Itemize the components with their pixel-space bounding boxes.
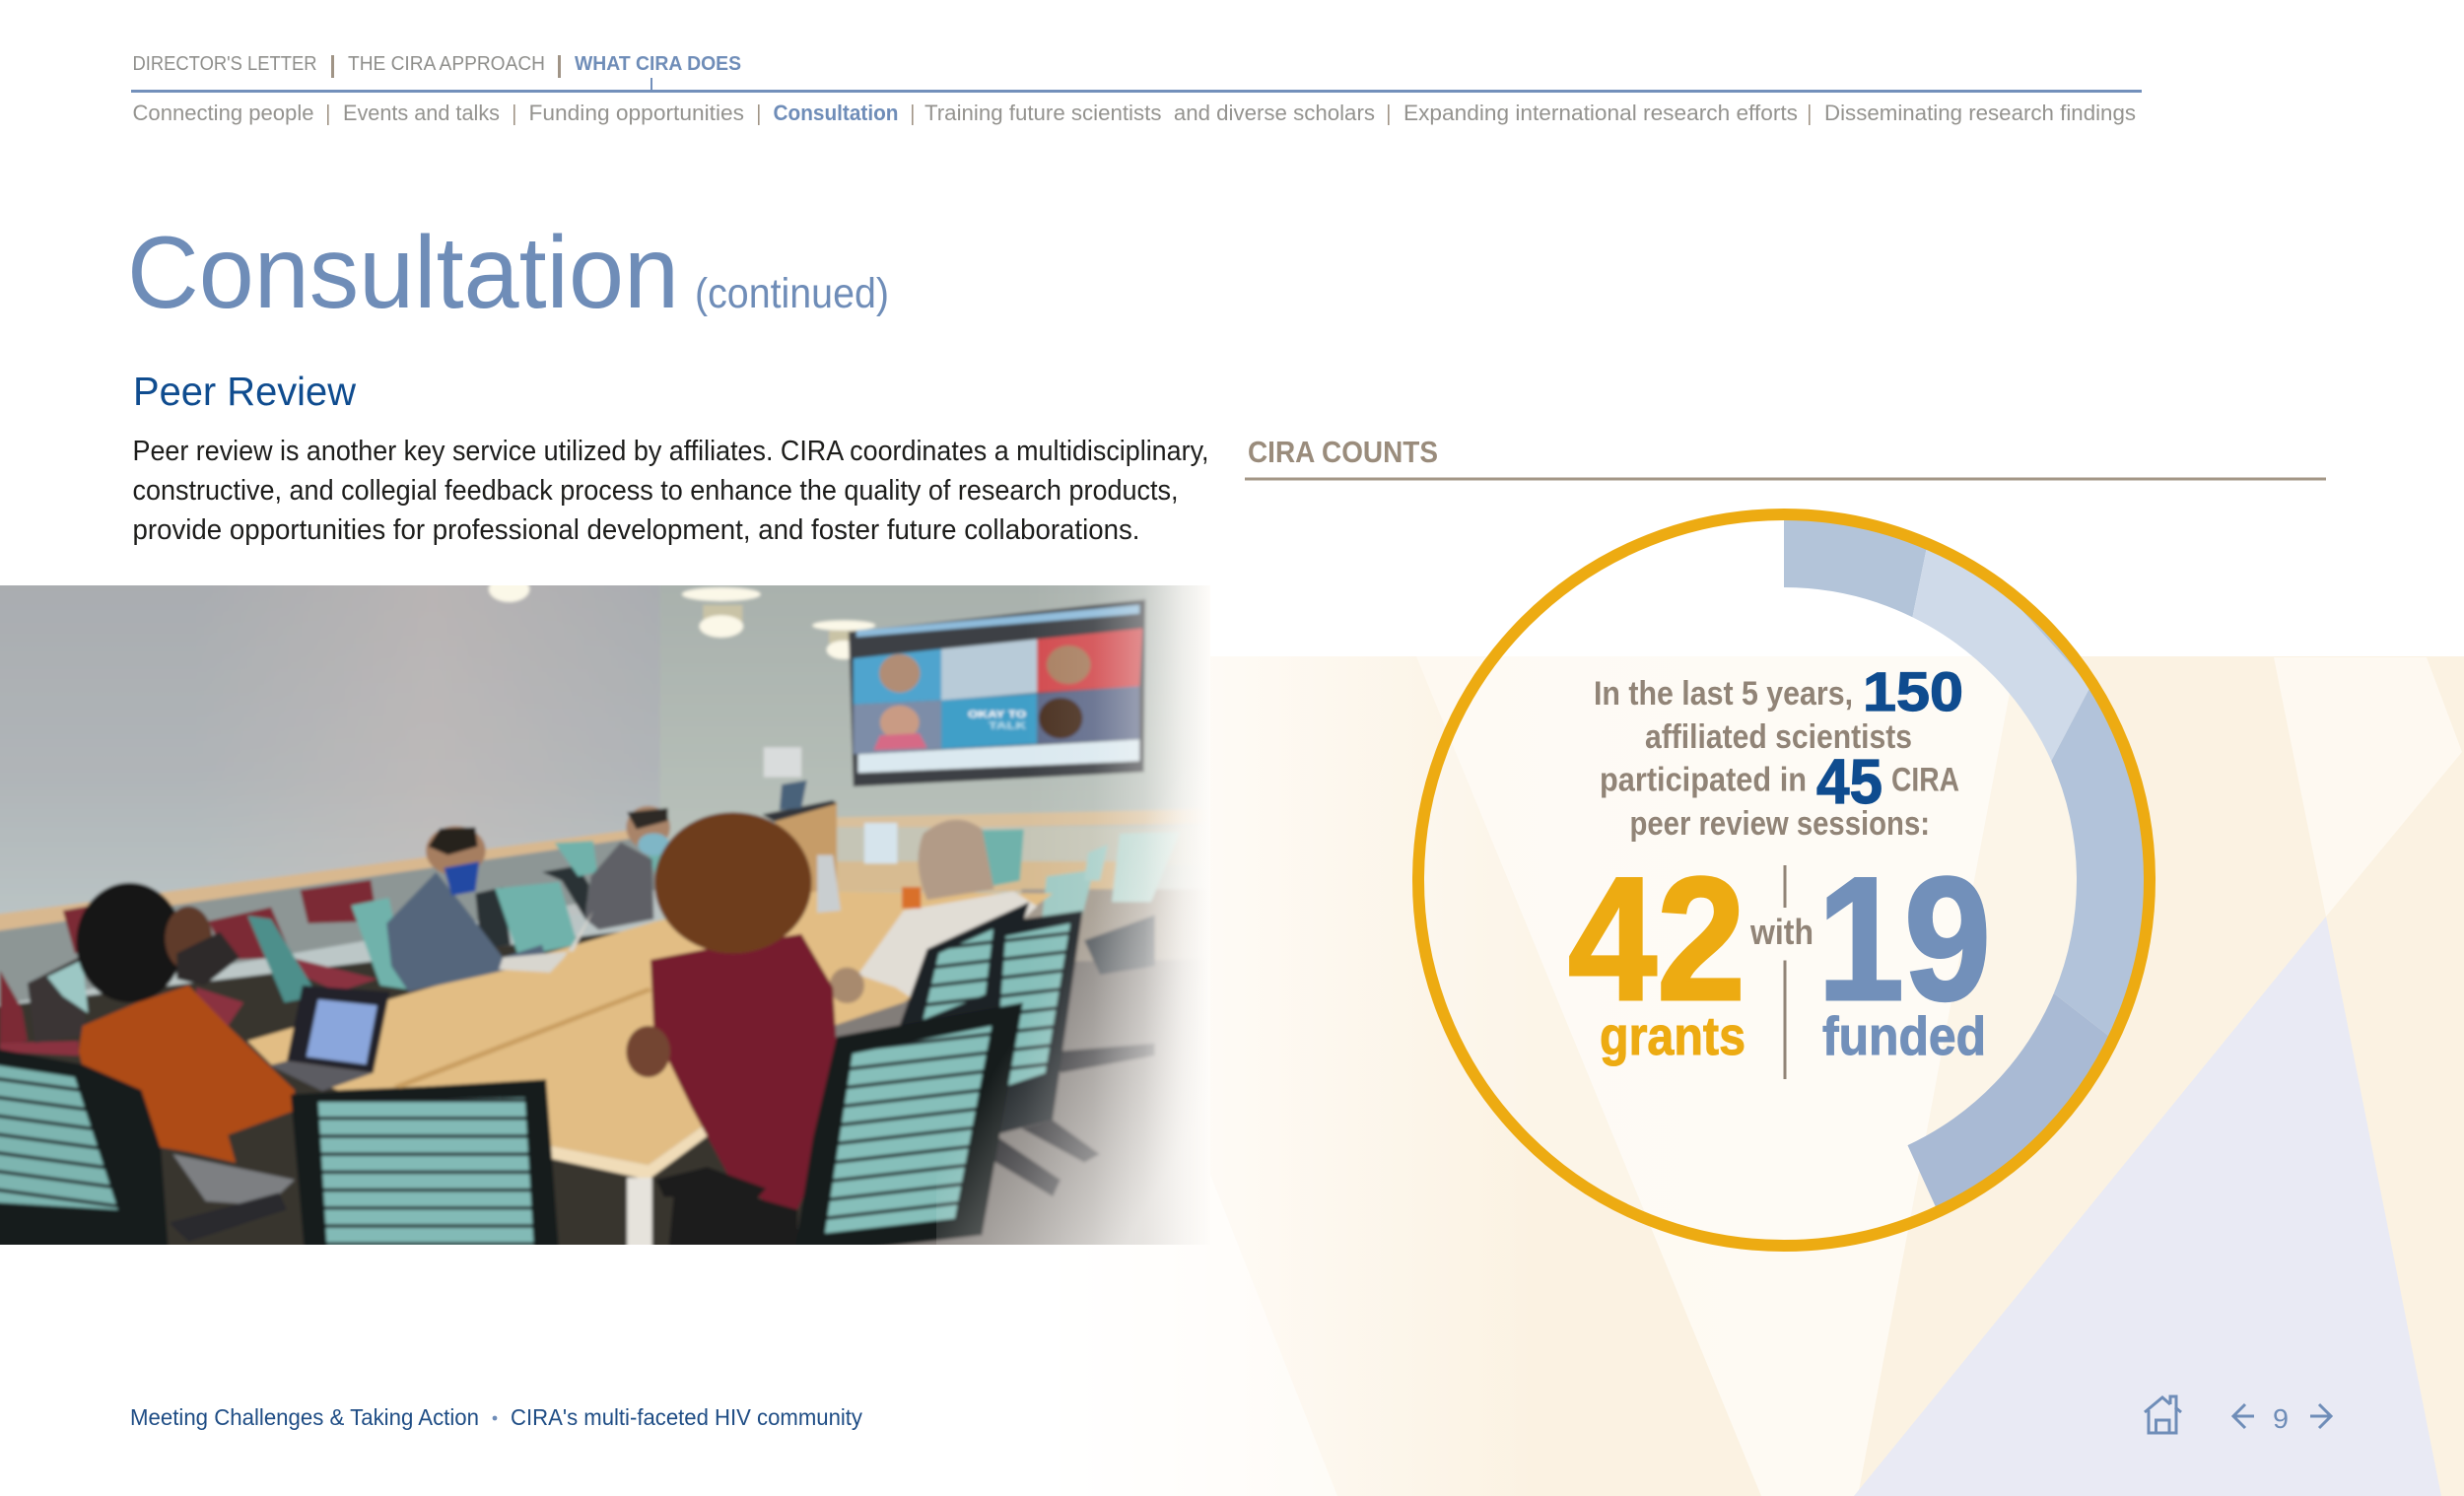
stat: 19 funded: funded xyxy=(1822,1005,1986,1066)
statement text: 150 xyxy=(1863,660,1963,722)
top navigation: sections xyxy=(132,53,741,78)
sub navigation: topics: Connecting people xyxy=(132,101,313,125)
footer text: CIRA's multi-faceted HIV community xyxy=(511,1404,862,1430)
wall screen with video call: TALK xyxy=(989,720,1026,731)
statement text: affiliated scientists xyxy=(1645,718,1912,756)
ceiling lamps xyxy=(489,577,875,659)
right foreground chair xyxy=(656,1002,1023,1257)
woman with orange top at laptop xyxy=(76,883,295,1205)
statement text: peer review sessions: xyxy=(1630,805,1930,843)
panel heading: CIRA COUNTS: CIRA COUNTS xyxy=(1248,435,1438,469)
statement text: CIRA xyxy=(1891,761,1959,798)
gold circle outline xyxy=(1418,514,2150,1246)
maroon stacked chairs xyxy=(0,880,377,1055)
open laptop with blue document xyxy=(269,986,389,1091)
ring segment 2 xyxy=(1912,547,2090,761)
stat circle xyxy=(1418,514,2150,1246)
sub navigation: topics: Expanding international research efforts xyxy=(1403,101,1798,125)
woman with curly hair in maroon xyxy=(626,812,841,1257)
man in blue with mask at laptop xyxy=(386,826,593,991)
footer text: Meeting Challenges & Taking Action xyxy=(130,1404,479,1430)
room walls and floor xyxy=(0,585,1198,1245)
statement text: In the last 5 years, xyxy=(1594,675,1853,713)
ring segment 3 xyxy=(2051,686,2147,1038)
ring overlap sliver xyxy=(2006,592,2090,686)
top navigation: sections: DIRECTOR'S LETTER xyxy=(132,53,317,75)
ring segment 1 xyxy=(1784,517,1927,617)
top navigation: sections: THE CIRA APPROACH xyxy=(348,53,545,75)
page title: (continued) xyxy=(695,270,889,317)
page title: Consultation xyxy=(127,216,679,330)
notice and podium xyxy=(762,747,897,898)
circle tint xyxy=(1418,514,2150,1246)
statement text xyxy=(1594,660,1963,843)
sub navigation: topics: Events and talks xyxy=(343,101,500,125)
sub navigation: topics: Funding opportunities xyxy=(528,101,744,125)
heading: Peer Review: Peer Review xyxy=(133,369,356,414)
stat: 42 grants: 42 xyxy=(1568,841,1745,1037)
divider with the word with xyxy=(1749,865,1814,1079)
teal office chairs along far side xyxy=(47,830,1024,1013)
body text: constructive, and collegial feedback process to enhance the quality of research products, xyxy=(132,475,1179,507)
panel heading: CIRA COUNTS xyxy=(1245,435,2326,481)
navigation rule xyxy=(131,78,2142,93)
icon: next arrow xyxy=(2310,1404,2331,1428)
photo lower-right fade xyxy=(936,892,1198,1245)
body text: provide opportunities for professional development, and foster future collaborations. xyxy=(132,514,1139,546)
conference table xyxy=(247,891,1053,1251)
divider with the word with: with xyxy=(1749,912,1814,952)
top navigation: sections: WHAT CIRA DOES xyxy=(575,53,741,75)
body text: Peer review is another key service utilized by affiliates. CIRA coordinates a multidisciplinary, xyxy=(132,436,1208,467)
page number: 9 xyxy=(2273,1403,2289,1434)
right side chairs and bases xyxy=(992,833,1170,1196)
footer text xyxy=(130,1404,862,1430)
stat: 19 funded: 19 xyxy=(1817,841,1991,1037)
background: geometric cream and lavender panel xyxy=(986,656,2464,1496)
woman with hijab in white xyxy=(817,820,1037,1009)
sub navigation: topics: Disseminating research findings xyxy=(1824,101,2136,125)
left foreground chair xyxy=(0,1046,287,1257)
man in grey with teal mask xyxy=(585,806,670,929)
sub navigation: topics: Consultation xyxy=(773,101,899,125)
ring segment 4 xyxy=(1908,993,2111,1209)
stat: 42 grants: grants xyxy=(1600,1005,1745,1066)
sub navigation: topics xyxy=(132,101,2136,125)
statement text: 45 xyxy=(1816,746,1882,817)
middle foreground chair xyxy=(291,1079,560,1257)
icon: previous arrow xyxy=(2233,1404,2254,1428)
sub navigation: topics: Training future scientists and diverse scholars xyxy=(924,101,1375,125)
handbag on table xyxy=(830,968,864,1003)
right front chair backs xyxy=(900,902,1083,1137)
wall screen with video call xyxy=(849,599,1145,786)
body text xyxy=(132,436,1208,546)
statement text: participated in xyxy=(1600,761,1807,798)
icon: home xyxy=(2145,1396,2181,1433)
photo: peer review meeting in conference room xyxy=(0,573,1288,1257)
wall screen with video call: OKAY TO xyxy=(968,709,1026,720)
photo right-edge fade xyxy=(1051,585,1210,1245)
